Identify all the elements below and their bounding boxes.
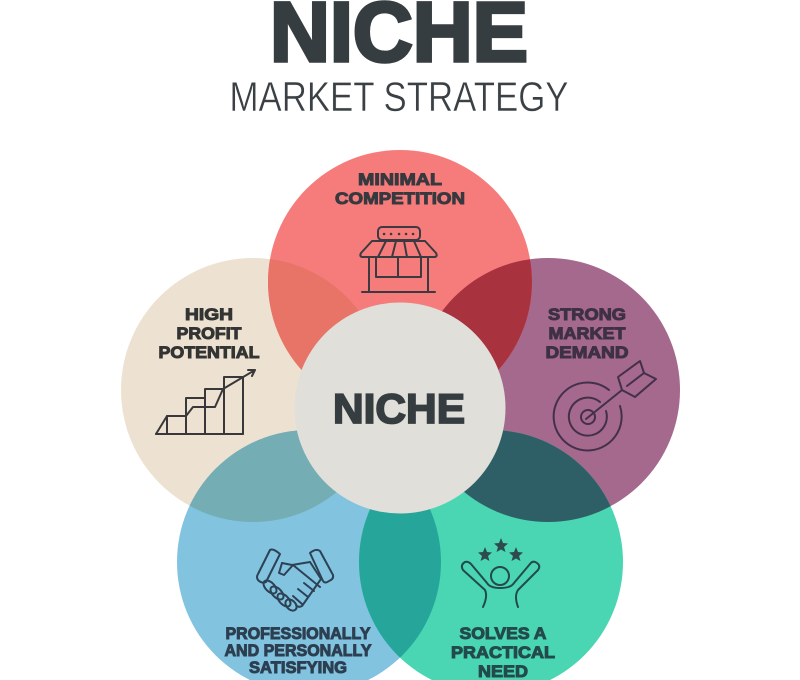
overlap: right and bottom right (464, 430, 611, 522)
label: professionally and personally satisfying (224, 624, 372, 677)
label: minimal competition (335, 170, 465, 208)
circle: solves a practical need (359, 430, 623, 680)
icon: target with arrow (554, 361, 656, 450)
label: high profit potential: POTENTIAL (158, 343, 260, 362)
label: high profit potential (158, 305, 260, 362)
circle: high profit potential (121, 258, 385, 522)
icon: handshake (257, 550, 333, 613)
overlap: bottom left and bottom right (359, 509, 441, 658)
icon: storefront (360, 227, 437, 292)
icon detail: stars (478, 538, 523, 561)
center label: NICHE (333, 385, 465, 432)
subtitle: market strategy: MARKET STRATEGY (230, 73, 568, 120)
label: solves a practical need (451, 624, 555, 680)
label: high profit potential: PROFIT (176, 324, 242, 343)
label: strong market demand: STRONG (548, 305, 626, 324)
overlap: top and left (268, 259, 358, 370)
overlap: left and bottom left (190, 430, 336, 522)
label: solves a practical need: SOLVES A (460, 624, 546, 643)
label: professionally and personally satisfying: SATISFYING (249, 658, 347, 677)
overlap: top and right (442, 259, 532, 370)
circle: strong market demand (416, 258, 680, 522)
label: high profit potential: HIGH (185, 305, 233, 324)
center circle (294, 302, 506, 514)
label: minimal competition: COMPETITION (335, 189, 465, 208)
circle: professionally and personally satisfying (177, 430, 441, 680)
icon: person with stars (462, 538, 539, 607)
label: professionally and personally satisfying: PROFESSIONALLY (226, 624, 371, 643)
icon: rising bar chart (156, 370, 255, 434)
label: minimal competition: MINIMAL (358, 170, 442, 189)
label: solves a practical need: PRACTICAL (451, 643, 555, 662)
label: strong market demand: DEMAND (546, 343, 628, 362)
label: professionally and personally satisfying: AND PERSONALLY (224, 641, 372, 660)
label: strong market demand (546, 305, 628, 362)
circle: minimal competition (268, 150, 532, 414)
label: strong market demand: MARKET (548, 324, 626, 343)
